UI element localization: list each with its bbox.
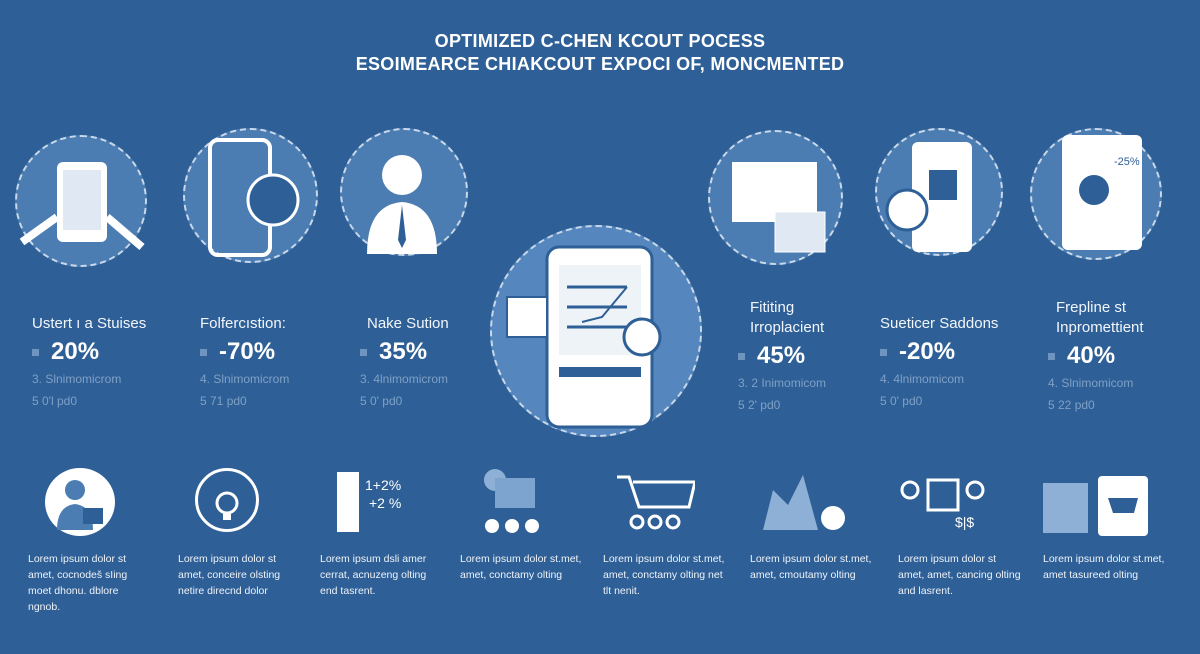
- bottom text 7: Lorem ipsum dolor st amet, amet, cancing olting and lasrent.: [898, 553, 1021, 597]
- stat 2: 5 71 pd0: [200, 394, 247, 408]
- stat 6: 40%: [1067, 342, 1115, 369]
- bottom icon 6: [763, 475, 845, 530]
- icon: circle 1 tablet: [15, 135, 147, 267]
- stat 6: 5 22 pd0: [1048, 398, 1095, 412]
- stat 6: Frepline st: [1056, 299, 1126, 316]
- bottom text 8: Lorem ipsum dolor st.met, amet tasureed olting: [1043, 553, 1164, 581]
- stat 3: 35%: [379, 338, 427, 365]
- bottom text 4: Lorem ipsum dolor st.met, amet, conctamy olting: [460, 553, 581, 581]
- stat 4: 5 2' pd0: [738, 398, 780, 412]
- icon: circle 2 phone: [183, 128, 318, 263]
- stat 6: [1048, 299, 1144, 412]
- stat 5: -20%: [899, 338, 955, 365]
- stat 4: 3. 2 Inimomicom: [738, 376, 826, 390]
- stat 5: Sueticer Saddons: [880, 315, 998, 332]
- stat 2: 4. Slnimomicrom: [200, 372, 289, 386]
- bottom icon 7: [900, 478, 984, 530]
- stat 3: [360, 315, 449, 408]
- bottom text 1: Lorem ipsum dolor st amet, cocnodeš sIing moet dhonu. dblore ngnob.: [28, 553, 127, 613]
- icon: central phone circle: [490, 225, 702, 437]
- bottom icon 8: [1043, 476, 1148, 536]
- stat 5: 4. 4lnimomicom: [880, 372, 964, 386]
- stat 4: Fititing: [750, 299, 794, 316]
- stat 2: [200, 315, 289, 408]
- bottom text 3: Lorem ipsum dsli amer cerrat, acnuzeng olting end tasrent.: [320, 553, 426, 597]
- stat 4: 45%: [757, 342, 805, 369]
- stat 1: 3. Slnimomicrom: [32, 372, 121, 386]
- icon: circle 6: [875, 128, 1003, 256]
- stat 5: 5 0' pd0: [880, 394, 922, 408]
- stat 2: -70%: [219, 338, 275, 365]
- stat 6: Inpromettient: [1056, 319, 1144, 336]
- icon: circle 5: [708, 130, 843, 265]
- bottom icon 3: [337, 472, 401, 532]
- stat 1: Ustert ı a Stuises: [32, 315, 146, 332]
- bottom text 5: Lorem ipsum dolor st.met, amet, conctamy olting net tlt nenit.: [603, 553, 724, 597]
- bottom icon 3: 1+2%: [365, 477, 401, 493]
- bottom icon 4: [484, 469, 539, 533]
- icon: circle 3 person: [340, 128, 468, 256]
- stat 2: Folfercıstion:: [200, 315, 286, 332]
- stat 1: 5 0'l pd0: [32, 394, 77, 408]
- bottom icon 3: +2 %: [369, 495, 401, 511]
- title: OPTIMIZED C-CHEN KCOUT POCESS: [435, 31, 765, 51]
- stat 3: Nake Sution: [367, 315, 449, 332]
- bottom icon 7: $|$: [955, 514, 974, 530]
- stat 6: 4. Slnimomicom: [1048, 376, 1133, 390]
- bottom icon 2: [195, 468, 259, 532]
- bottom icon 1: [45, 468, 115, 536]
- stat 4: [738, 299, 826, 412]
- stat 4: Irroplacient: [750, 319, 824, 336]
- stat 3: 3. 4lnimomicrom: [360, 372, 448, 386]
- stat 1: [32, 315, 146, 408]
- subtitle: ESOIMEARCE CHIAKCOUT EXPOCI OF, MONCMENTED: [356, 54, 844, 74]
- bottom icon 5: [617, 476, 695, 530]
- bottom text 6: Lorem ipsum dolor st.met, amet, cmoutamy olting: [750, 553, 871, 581]
- bottom text 2: Lorem ipsum dolor st amet, conceire olsting netire direcnd dolor: [178, 553, 280, 597]
- stat 3: 5 0' pd0: [360, 394, 402, 408]
- icon: circle 7: [1030, 128, 1162, 260]
- icon: circle 7: -25%: [1114, 156, 1140, 168]
- stat 1: 20%: [51, 338, 99, 365]
- stat 5: [880, 315, 998, 408]
